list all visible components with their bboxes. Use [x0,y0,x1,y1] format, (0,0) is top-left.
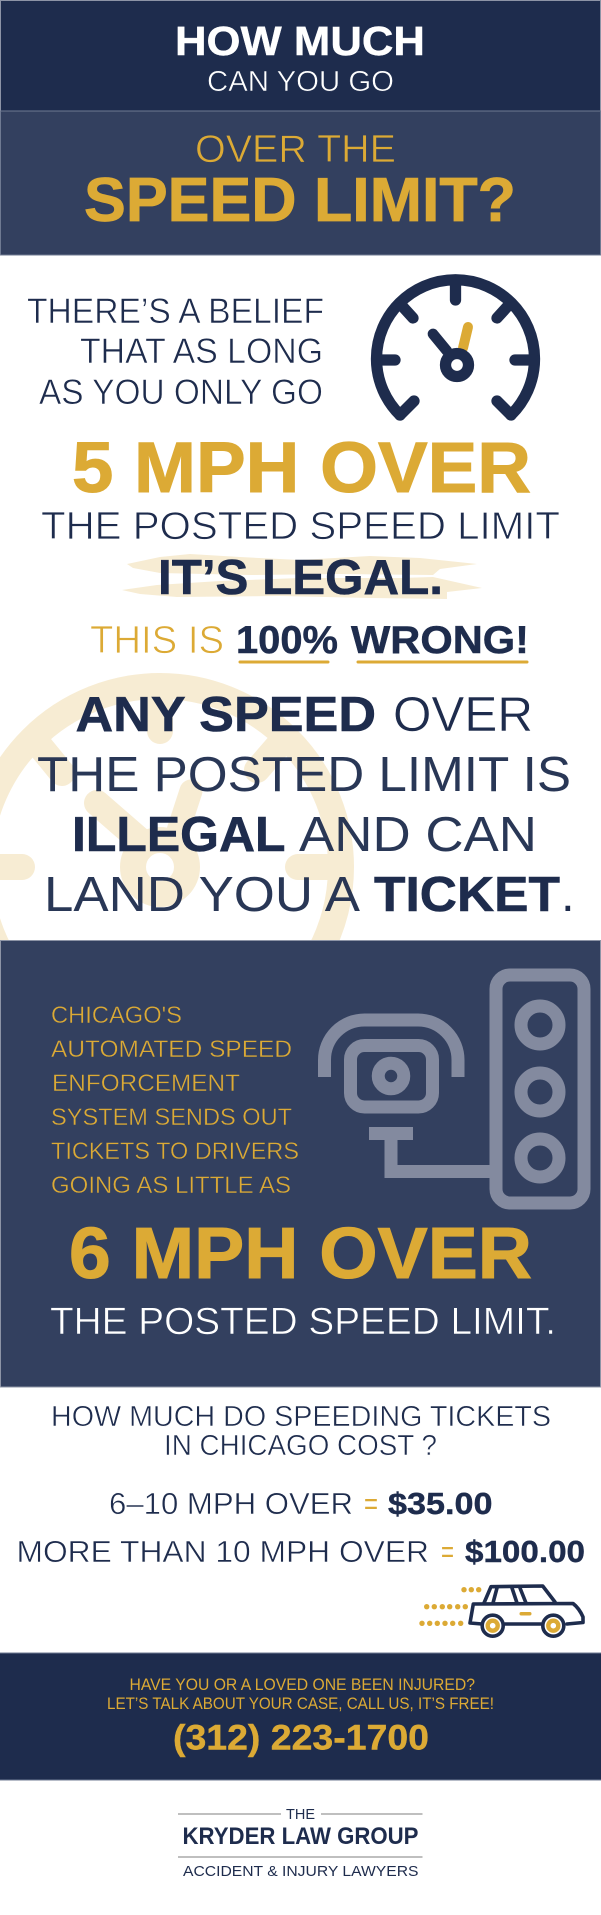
callout: this is 100% wrong: THIS IS [90,619,224,662]
text: phone number: (312) 223-1700 [173,1718,429,1758]
logo: kryder law group [178,1807,422,1880]
text block: chicago system [51,1002,299,1199]
text block: belief intro: AS YOU ONLY GO [39,373,323,412]
price row: more than 10 mph: MORE THAN 10 MPH OVER [16,1534,429,1569]
text block: belief intro: THERE’S A BELIEF [27,292,324,331]
callout: this is 100% wrong [90,619,529,662]
text block: chicago system: GOING AS LITTLE AS [51,1172,291,1199]
text block: any speed is illegal [37,688,575,922]
icon: traffic light speed camera [324,975,584,1203]
icon: speedometer [377,280,534,415]
panel: call to action [0,1653,601,1780]
text: the posted speed limit: THE POSTED SPEED LIMIT [41,505,560,548]
text block: any speed is illegal: THE POSTED LIMIT IS [37,748,571,802]
price row: 6-10 mph: = [364,1486,378,1521]
heading: ticket cost question [51,1401,551,1462]
price row: 6-10 mph: 6–10 MPH OVER [109,1486,353,1521]
icon: speedometer watermark [0,686,341,1048]
text: call us: LET’S TALK ABOUT YOUR CASE, CALL US, IT’S FREE! [107,1694,494,1713]
heading: ticket cost question: HOW MUCH DO SPEEDING TICKETS [51,1401,551,1433]
text block: any speed is illegal: AND CAN [299,808,537,862]
text block: any speed is illegal: TICKET [374,868,560,922]
logo: kryder law group: KRYDER LAW GROUP [182,1823,418,1850]
price row: 6-10 mph: $35.00 [388,1486,492,1521]
logo: kryder law group: ACCIDENT & INJURY LAWYERS [183,1863,418,1880]
text block: any speed is illegal: . [561,868,575,922]
text block: chicago system: SYSTEM SENDS OUT [51,1104,292,1131]
text block: belief intro [27,292,324,412]
stat: 5 mph over: 5 MPH OVER [72,429,531,508]
text block: any speed is illegal: LAND YOU A [44,868,360,922]
icon: speeding car [419,1586,583,1636]
text block: any speed is illegal: ILLEGAL [72,808,286,862]
title: over the: OVER THE [195,128,396,171]
text block: chicago system: ENFORCEMENT [52,1070,240,1097]
price row: 6-10 mph [109,1486,492,1521]
price row: more than 10 mph: = [441,1534,454,1569]
panel: title header [0,0,600,255]
text block: belief intro: THAT AS LONG [80,332,323,371]
title: speed limit: SPEED LIMIT? [84,166,516,235]
title: can you go: CAN YOU GO [207,66,394,98]
text: it's legal: IT’S LEGAL. [158,551,443,605]
callout: this is 100% wrong: WRONG! [351,619,529,662]
text: injured question: HAVE YOU OR A LOVED ONE BEEN INJURED? [130,1675,475,1694]
logo: kryder law group: THE [286,1807,315,1823]
text block: any speed is illegal: ANY SPEED [76,688,376,742]
text block: chicago system: CHICAGO'S [51,1002,182,1029]
brush highlight [122,554,482,599]
text block: chicago system: AUTOMATED SPEED [51,1036,292,1063]
callout: this is 100% wrong: 100% [236,619,338,662]
text block: chicago system: TICKETS TO DRIVERS [51,1138,299,1165]
text block: any speed is illegal: OVER [393,688,533,742]
heading: ticket cost question: IN CHICAGO COST ? [164,1430,437,1462]
price row: more than 10 mph: $100.00 [465,1534,585,1569]
stat: 6 mph over: 6 MPH OVER [69,1214,532,1294]
text: the posted speed limit: THE POSTED SPEED LIMIT. [50,1301,556,1343]
title: how much: HOW MUCH [175,18,425,64]
panel: automated speed enforcement [0,940,600,1387]
